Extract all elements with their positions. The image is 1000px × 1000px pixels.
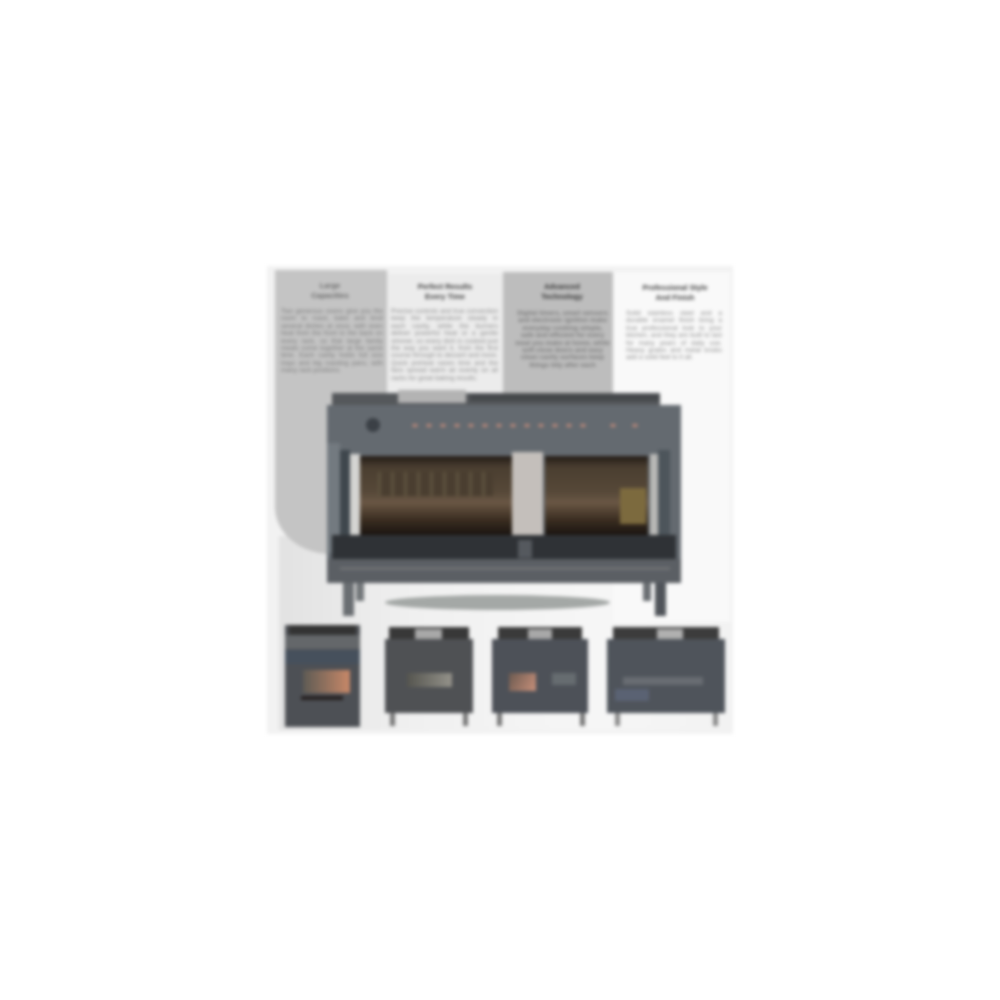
text block: column 4: Solid stainless steel and a durable enamel finish bring a true professional look to your kitchen, and they are built to last for many years of daily use. Heavy grates and metal knobs add a solid feel to it all. bbox=[626, 310, 722, 361]
text block: column 1: Two generous ovens give you the room to roast, bake and broil several dishes at once, with even heat from the front to the back on every rack, so that large family meals come together at the same time. Each cavity holds full size trays and big roasting pans, with many rack positions. bbox=[281, 308, 383, 374]
heading: column 1: Large bbox=[320, 281, 340, 290]
cooktop bbox=[332, 393, 660, 405]
panel: white column 4 bbox=[613, 272, 730, 622]
left oven cavity bbox=[360, 456, 512, 536]
thumbnail: range 1 bbox=[285, 625, 360, 727]
thumbnail: range 2 bbox=[382, 624, 476, 728]
thumbnail: range 4 bbox=[604, 624, 728, 728]
panel: lower background shade bbox=[279, 536, 730, 730]
heading: column 3: Advanced bbox=[544, 282, 580, 291]
centre pillar bbox=[512, 452, 543, 540]
left side panel bbox=[327, 443, 340, 553]
control knobs bbox=[366, 418, 380, 432]
main dual oven range bbox=[324, 388, 684, 619]
heading: column 2 bbox=[416, 282, 474, 302]
legs bbox=[343, 583, 354, 616]
bottom band bbox=[327, 559, 681, 583]
heading: column 4 bbox=[640, 282, 710, 302]
left side frame bbox=[340, 450, 350, 540]
panel: gray left curve bbox=[275, 270, 387, 554]
thumbnail: range 3 bbox=[489, 624, 591, 728]
open oven doors bbox=[332, 535, 676, 559]
door handle centre bbox=[518, 540, 532, 558]
right side frame bbox=[650, 454, 658, 540]
floor shadow bbox=[385, 595, 610, 610]
heading: column 2: Perfect Results bbox=[418, 282, 472, 291]
heading: column 4: And Finish bbox=[656, 293, 694, 302]
panel: gray column 3 bbox=[503, 272, 613, 396]
text block: column 2: Precise controls and true convection keep the temperature steady in each cavity, while the burners deliver powerful heat or a gentle simmer, so every dish is cooked just the way you want it, from the first course through to dessert and more. Quick preheat saves time and the fans spread warm air evenly on all racks for great baking results. bbox=[391, 308, 498, 382]
right oven cavity bbox=[545, 456, 648, 536]
heading: column 4: Professional Style bbox=[642, 283, 708, 292]
heading: column 3 bbox=[540, 282, 584, 302]
panel: white column 2 bbox=[387, 274, 503, 396]
heading: column 3: Technology bbox=[541, 292, 583, 301]
heading: column 1: Capacities bbox=[311, 291, 349, 300]
heading: column 2: Every Time bbox=[425, 292, 465, 301]
infographic card bbox=[267, 266, 733, 734]
text block: column 3: Digital timers, smart sensors and electronic ignition make everyday cooking simple, safe and efficient for every meal you make at home, while soft close doors and easy clean cavity surfaces keep things tidy after each bbox=[515, 310, 610, 369]
heading: column 1 bbox=[310, 281, 350, 300]
range body bbox=[327, 405, 681, 583]
rack lines left bbox=[378, 472, 493, 496]
oven light bbox=[620, 488, 646, 524]
